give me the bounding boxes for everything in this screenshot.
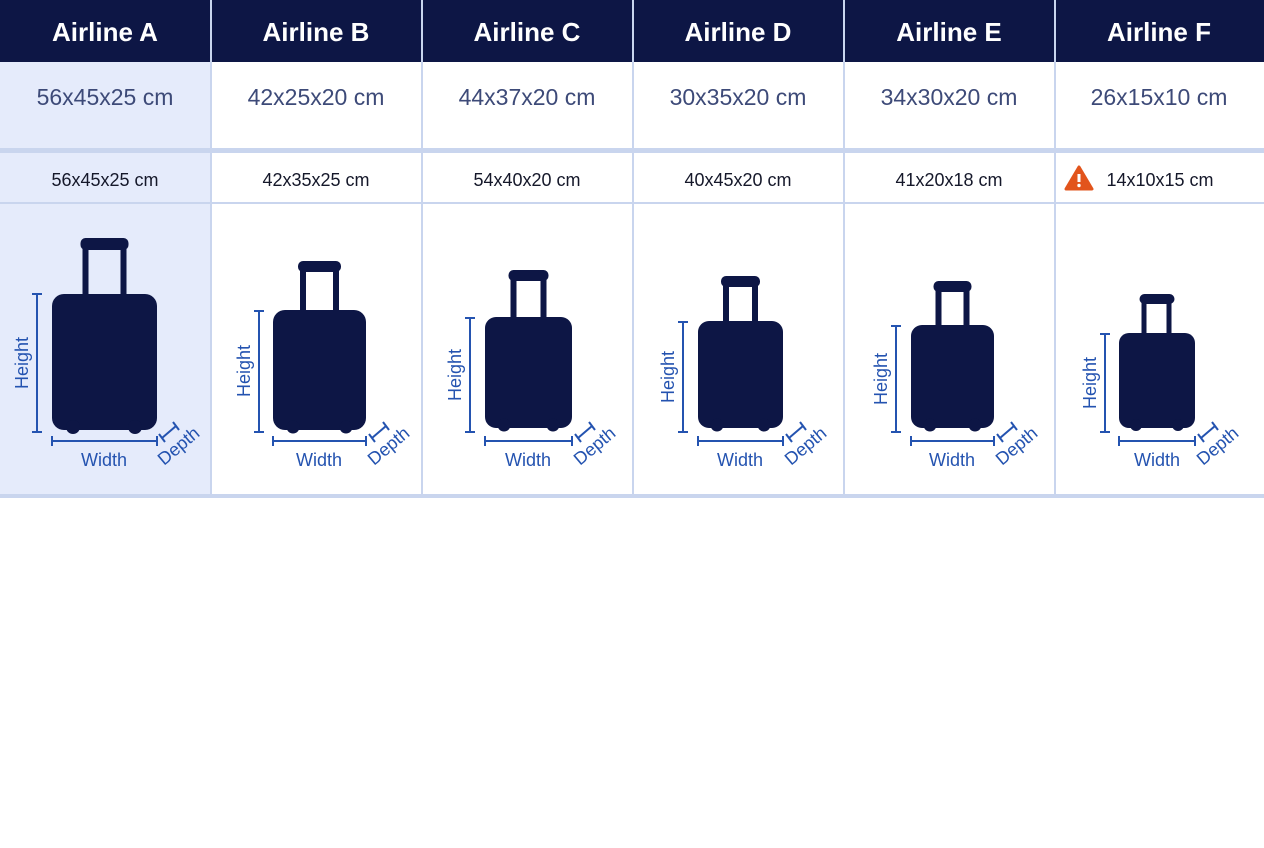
suitcase E: Height bbox=[871, 353, 891, 405]
row: stated dimensions: 26x15x10 cm bbox=[1091, 84, 1227, 110]
row: measured dimensions bbox=[51, 170, 1214, 190]
suitcase B: Height bbox=[234, 345, 254, 397]
suitcase A: Height bbox=[12, 337, 32, 389]
suitcase D: Height bbox=[658, 351, 678, 403]
suitcase C: Height bbox=[445, 349, 465, 401]
row: measured dimensions: 40x45x20 cm bbox=[684, 170, 792, 190]
row: stated dimensions: 34x30x20 cm bbox=[881, 84, 1017, 110]
row: stated dimensions: 56x45x25 cm bbox=[37, 84, 173, 110]
suitcase F: Depth bbox=[1193, 423, 1242, 469]
suitcase F: Width bbox=[1134, 450, 1180, 470]
row: stated dimensions: 42x25x20 cm bbox=[248, 84, 384, 110]
row: stated dimensions: 44x37x20 cm bbox=[459, 84, 595, 110]
suitcase D: Depth bbox=[781, 423, 830, 469]
row: measured dimensions: 14x10x15 cm bbox=[1106, 170, 1214, 190]
row: measured dimensions: 42x35x25 cm bbox=[262, 170, 370, 190]
header row: Airline D bbox=[685, 17, 791, 47]
suitcase D bbox=[658, 276, 830, 470]
suitcase E bbox=[871, 281, 1041, 470]
suitcase B: Depth bbox=[364, 423, 413, 469]
suitcase C: Width bbox=[505, 450, 551, 470]
suitcase C: Depth bbox=[570, 423, 619, 469]
header row: Airline A bbox=[52, 17, 158, 47]
suitcase A bbox=[12, 238, 203, 470]
suitcase D: Width bbox=[717, 450, 763, 470]
row: measured dimensions: 54x40x20 cm bbox=[473, 170, 581, 190]
suitcase F bbox=[1080, 294, 1242, 470]
suitcase A: Width bbox=[81, 450, 127, 470]
suitcase C bbox=[445, 270, 619, 470]
row: stated dimensions bbox=[37, 84, 1227, 110]
header row: Airline C bbox=[474, 17, 581, 47]
header row: Airline F bbox=[1107, 17, 1211, 47]
suitcase F: Height bbox=[1080, 357, 1100, 409]
header row: Airline E bbox=[896, 17, 1002, 47]
icon: warning bbox=[1066, 167, 1092, 189]
row: measured dimensions: 56x45x25 cm bbox=[51, 170, 159, 190]
row: stated dimensions: 30x35x20 cm bbox=[670, 84, 806, 110]
suitcase A: Depth bbox=[154, 423, 203, 469]
suitcase B: Width bbox=[296, 450, 342, 470]
suitcase E: Width bbox=[929, 450, 975, 470]
header row: Airline B bbox=[263, 17, 369, 47]
suitcase B bbox=[234, 261, 413, 470]
row: measured dimensions: 41x20x18 cm bbox=[895, 170, 1003, 190]
suitcase E: Depth bbox=[992, 423, 1041, 469]
header row bbox=[0, 0, 1264, 62]
